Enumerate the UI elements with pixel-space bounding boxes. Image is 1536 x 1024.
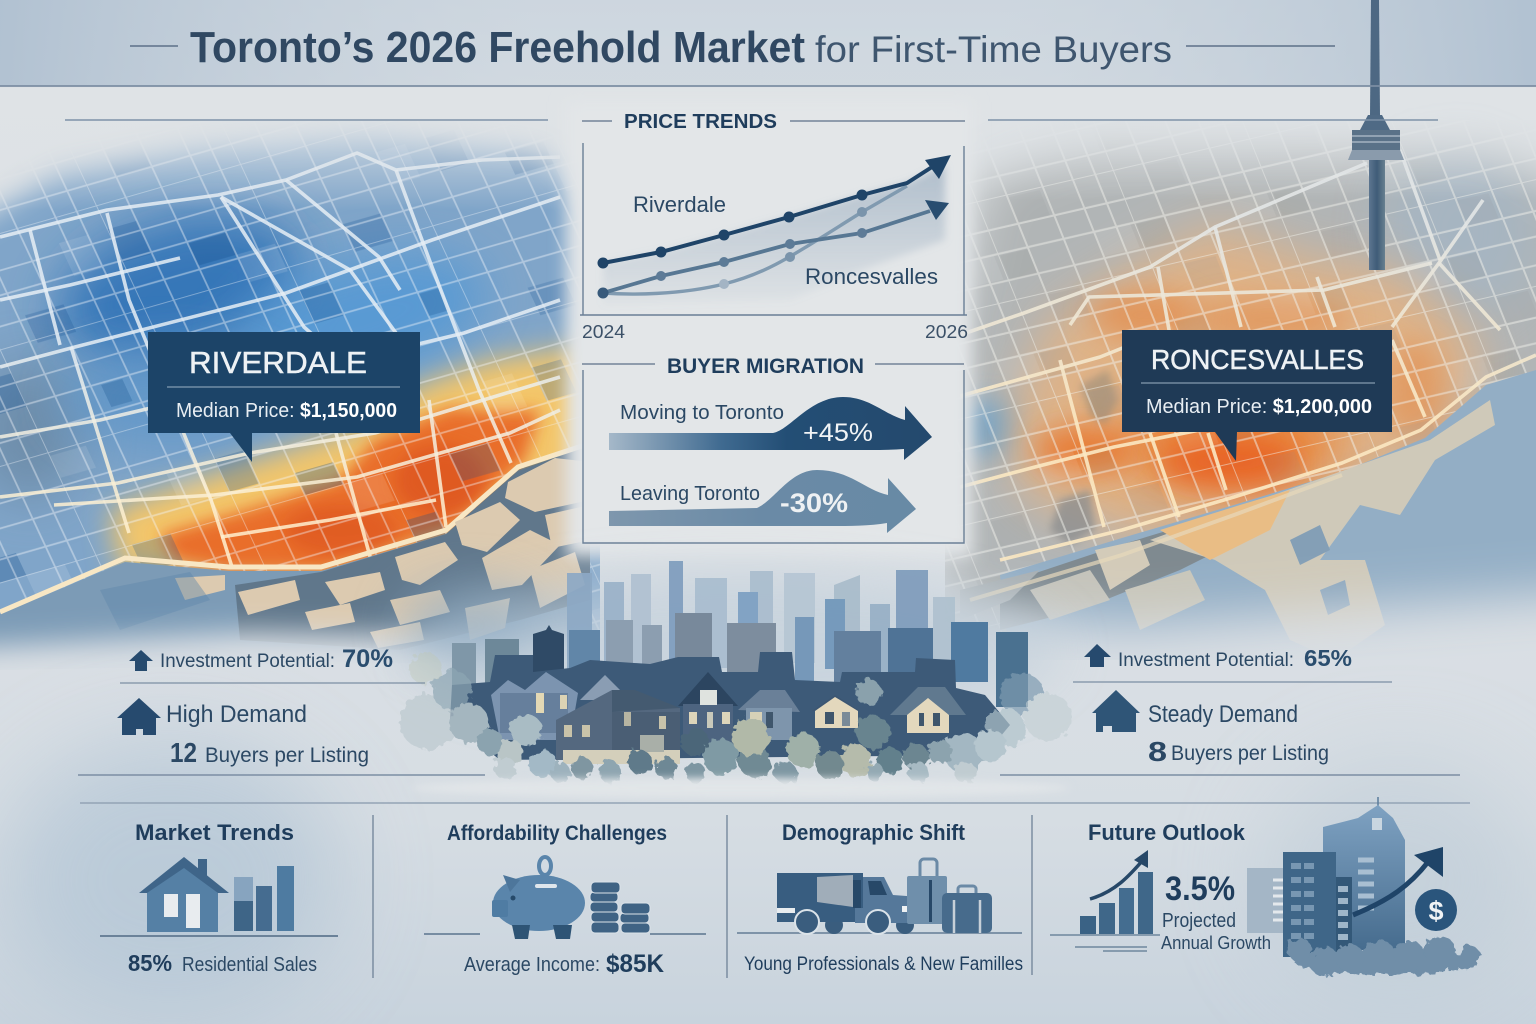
map: Riverdale heat map (0, 120, 600, 670)
icon: shrubs (1288, 936, 1480, 977)
icon: up arrow (129, 650, 153, 671)
arrow: growth (1353, 847, 1443, 915)
heading: demographic shift: Demographic Shift (782, 820, 966, 845)
title: Toronto’s 2026 Freehold Market (190, 23, 805, 72)
map: Roncesvalles heat map (945, 120, 1536, 660)
buyers per listing: Roncesvalles: Buyers per Listing (1171, 742, 1329, 765)
label heading: Riverdale: RIVERDALE (189, 345, 367, 380)
caption: young professionals: Young Professionals & New Familles (744, 954, 1023, 975)
heading: market trends: Market Trends (135, 820, 294, 845)
trees and foliage (449, 679, 1006, 783)
ground haze (410, 778, 1070, 798)
title: for First-Time Buyers (815, 29, 1172, 70)
label: moving to Toronto: Moving to Toronto (620, 402, 784, 424)
panel: Riverdale stats (78, 645, 485, 775)
icon: piggy bank and coins (424, 857, 706, 939)
icon: dollar coin (1415, 889, 1457, 931)
dark mid row (450, 652, 1010, 760)
line: Riverdale (598, 155, 951, 268)
value: 3.5%: 3.5% (1165, 870, 1235, 908)
demand: High Demand: High Demand (166, 701, 307, 728)
caption: annual growth: Annual Growth (1161, 933, 1271, 953)
demand: Steady Demand: Steady Demand (1148, 701, 1298, 728)
icon: CN Tower (1348, 0, 1404, 270)
panel: demographic shift (737, 820, 1023, 975)
houses (491, 672, 966, 764)
value: 85%: 85% (128, 950, 172, 976)
panel: affordability challenges (424, 822, 706, 978)
major streets: Riverdale (0, 153, 560, 567)
callout: Riverdale price label (148, 332, 420, 462)
series label: Roncesvalles: Roncesvalles (805, 264, 938, 289)
label: leaving Toronto: Leaving Toronto (620, 483, 760, 505)
heading: price trends: PRICE TRENDS (624, 111, 777, 133)
icon: moving truck and luggage (737, 859, 1022, 934)
icon: up arrow (1084, 644, 1111, 667)
value: 12: 12 (170, 737, 197, 768)
panel: buyer migration (582, 355, 964, 543)
panel: market trends (100, 820, 338, 976)
callout: Roncesvalles price label (1122, 330, 1392, 461)
arrow: leaving Toronto (609, 470, 916, 533)
value: 70%: 70% (342, 645, 393, 673)
axis label: 2024: 2024 (582, 322, 625, 342)
water and shoreline: Riverdale (0, 440, 590, 670)
caption: average income: Average Income: (464, 954, 600, 976)
icon: house (1092, 690, 1140, 732)
panel backdrop: centre (566, 102, 972, 557)
buyers per listing: Riverdale: Buyers per Listing (205, 744, 369, 767)
panel: price trends (580, 111, 968, 342)
far skyline (567, 561, 955, 707)
line: Roncesvalles (598, 200, 949, 298)
value: +45%: +45% (803, 419, 873, 447)
major streets: Roncesvalles (960, 150, 1536, 560)
value: $85K: $85K (606, 950, 664, 978)
icon: office towers (1247, 797, 1405, 957)
illustration: skyline and houses (400, 561, 1072, 798)
value: -30%: -30% (780, 488, 848, 518)
panel: Roncesvalles stats (1000, 644, 1460, 775)
icon: dollar coin: $ (1428, 896, 1444, 926)
heading: buyer migration: BUYER MIGRATION (667, 355, 864, 378)
caption: residential sales: Residential Sales (182, 954, 317, 976)
caption: projected: Projected (1162, 910, 1236, 932)
mid skyline (452, 613, 1028, 707)
median price: Riverdale: Median Price: $1,150,000 (176, 400, 397, 422)
series label: Riverdale: Riverdale (633, 192, 726, 217)
icon: house with bars (100, 857, 338, 936)
panel: future outlook (1050, 797, 1480, 977)
value: 8: 8 (1148, 736, 1167, 767)
arrow: moving to Toronto (609, 397, 932, 460)
median price: Roncesvalles: Median Price: $1,200,000 (1146, 396, 1372, 418)
label heading: Roncesvalles: RONCESVALLES (1151, 344, 1364, 375)
investment potential: Riverdale: Investment Potential: (160, 651, 335, 672)
axis label: 2026: 2026 (925, 322, 968, 342)
heading: affordability challenges: Affordability Challenges (447, 822, 667, 845)
water and shoreline: Roncesvalles (960, 370, 1536, 660)
value: 65%: 65% (1304, 645, 1352, 671)
investment potential: Roncesvalles: Investment Potential: (1118, 650, 1294, 671)
icon: growth bars (1050, 850, 1160, 951)
side foliage (400, 652, 1072, 750)
heading: future outlook: Future Outlook (1088, 820, 1246, 845)
icon: house (117, 698, 161, 735)
title (130, 23, 1335, 72)
line: third trend (603, 186, 907, 294)
